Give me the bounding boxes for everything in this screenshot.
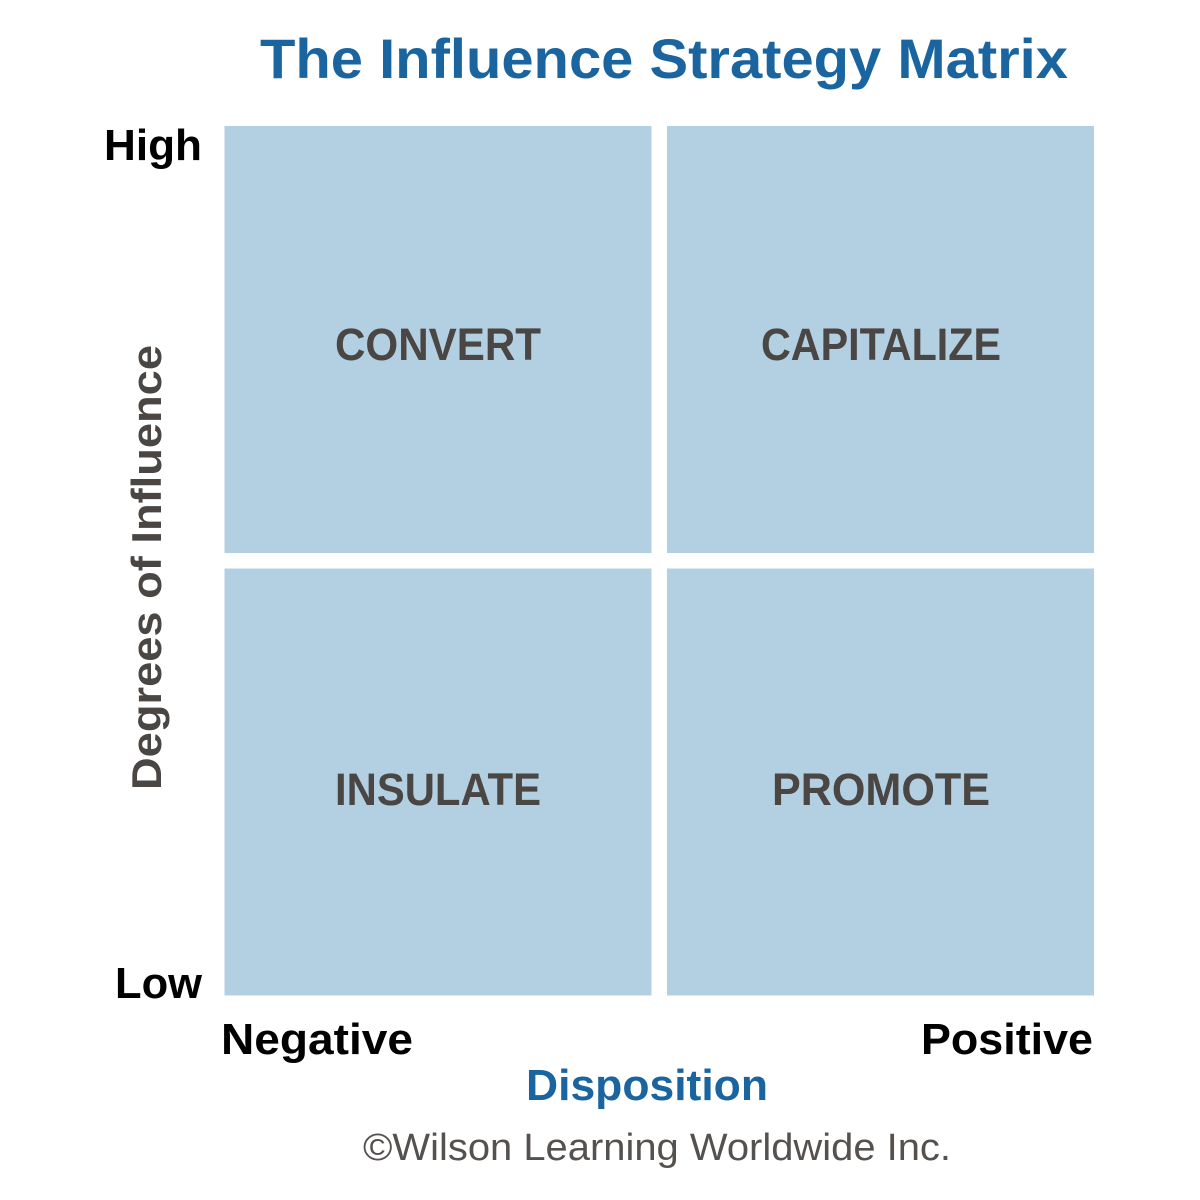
quadrant: convert bbox=[224, 126, 652, 553]
quadrant: insulate bbox=[224, 568, 652, 996]
quadrant: insulate: INSULATE bbox=[335, 764, 541, 815]
title: The Influence Strategy Matrix bbox=[260, 27, 1068, 90]
quadrant: promote bbox=[667, 568, 1094, 996]
y-axis high label: High bbox=[104, 121, 202, 170]
quadrant: promote: PROMOTE bbox=[772, 764, 990, 815]
quadrant: convert: CONVERT bbox=[335, 319, 541, 370]
x-axis negative label: Negative bbox=[221, 1015, 413, 1064]
quadrant: capitalize: CAPITALIZE bbox=[761, 319, 1001, 370]
y-axis title: Degrees of Influence bbox=[123, 345, 170, 790]
quadrant: capitalize bbox=[667, 126, 1094, 553]
x-axis positive label: Positive bbox=[921, 1015, 1093, 1064]
x-axis title: Disposition bbox=[526, 1061, 768, 1110]
copyright: ©Wilson Learning Worldwide Inc. bbox=[363, 1127, 951, 1169]
y-axis low label: Low bbox=[115, 959, 203, 1008]
